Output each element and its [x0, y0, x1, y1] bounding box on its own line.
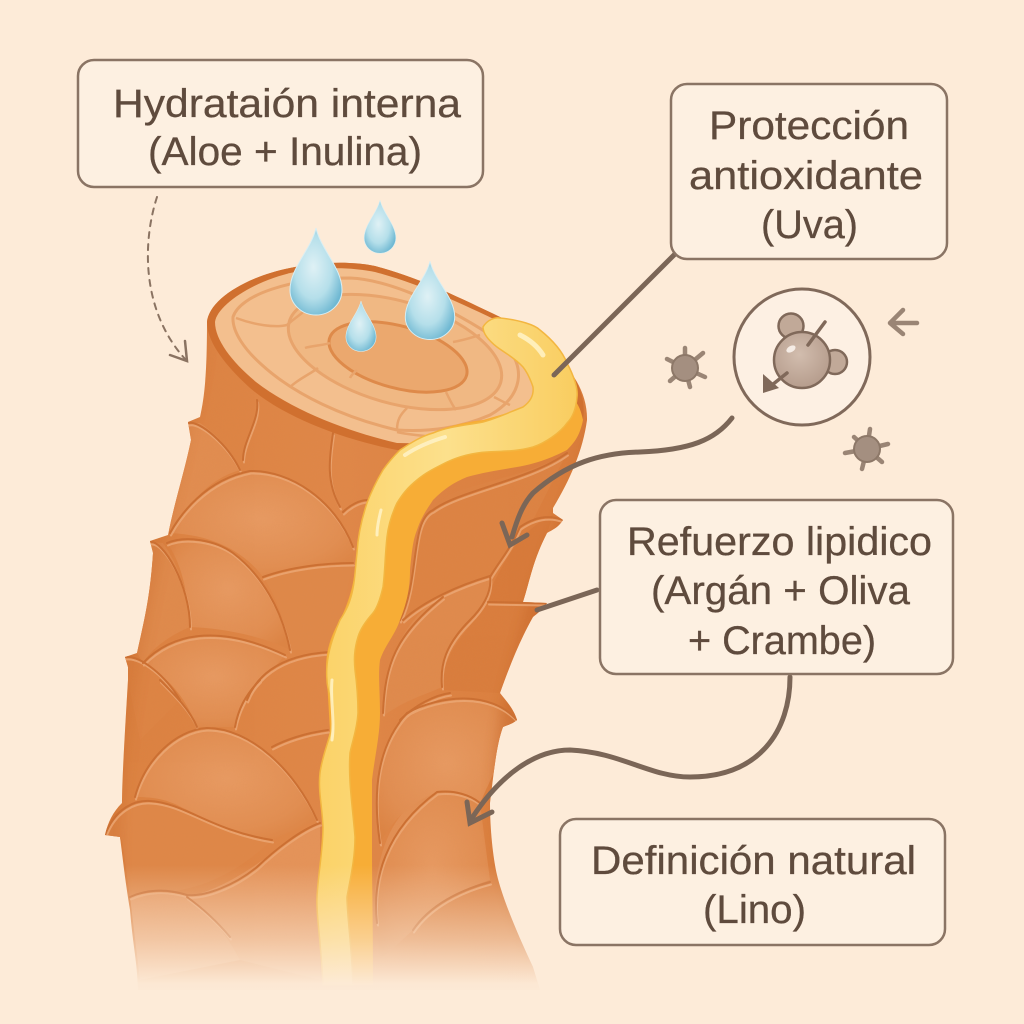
- shaded edge: [491, 516, 563, 788]
- callout text: + Crambe): [688, 619, 876, 663]
- scale outlines: [105, 400, 567, 937]
- callout: definicion natural: [560, 819, 945, 945]
- callout text: (Aloe + Inulina): [148, 130, 422, 174]
- callout text: Protección: [709, 104, 909, 148]
- callout: hidratacion interna: [78, 60, 483, 187]
- callout text: [627, 520, 932, 663]
- oil highlights: [332, 335, 543, 740]
- callout text: Definición natural: [591, 839, 916, 883]
- callout text: (Lino): [703, 888, 806, 932]
- callout: proteccion antioxidante: [671, 84, 947, 259]
- callout text: Hydrataión interna: [113, 82, 462, 126]
- connector: lipid box to hair: [537, 590, 597, 610]
- icon: free radical left: [667, 348, 705, 387]
- connector: antioxidant to oil: [554, 253, 676, 375]
- callout text: antioxidante: [689, 154, 923, 198]
- oil layer: orange band: [326, 395, 583, 985]
- arrowhead: [763, 374, 779, 393]
- callout text: (Argán + Oliva: [651, 569, 911, 613]
- cross-section face of the hair: [207, 263, 584, 451]
- water drop 3: [405, 261, 455, 340]
- callout text: Refuerzo lipidico: [627, 520, 932, 564]
- callout text: [689, 104, 923, 247]
- callout text: (Uva): [761, 203, 858, 247]
- circle: [734, 289, 870, 425]
- icon: small arrow: [890, 310, 917, 334]
- callout text: [113, 82, 462, 174]
- hair body: [105, 263, 587, 990]
- hair strand illustration: [90, 260, 600, 1000]
- arrow: antioxidant circle to hair: [502, 418, 732, 545]
- icon: free radical right: [845, 429, 888, 469]
- arrow: hydration dashed: [148, 197, 187, 361]
- arrow: lipid box to definition: [467, 677, 790, 823]
- water drop 2: [364, 200, 396, 253]
- arrow through molecule: [772, 322, 825, 385]
- callout text: [591, 839, 916, 932]
- water drop 1: [290, 228, 342, 315]
- molecule ball: [774, 332, 830, 388]
- icon: antioxidant molecule: [734, 289, 870, 425]
- callout: refuerzo lipidico: [600, 500, 953, 674]
- scale highlights: [106, 402, 568, 940]
- oil layer: yellow band: [317, 318, 577, 985]
- icon: water drops: [290, 200, 455, 352]
- cuticle scales: [105, 348, 569, 961]
- water drop 4: [346, 301, 376, 352]
- molecule ears: [778, 314, 804, 338]
- fade at bottom: [90, 865, 560, 1000]
